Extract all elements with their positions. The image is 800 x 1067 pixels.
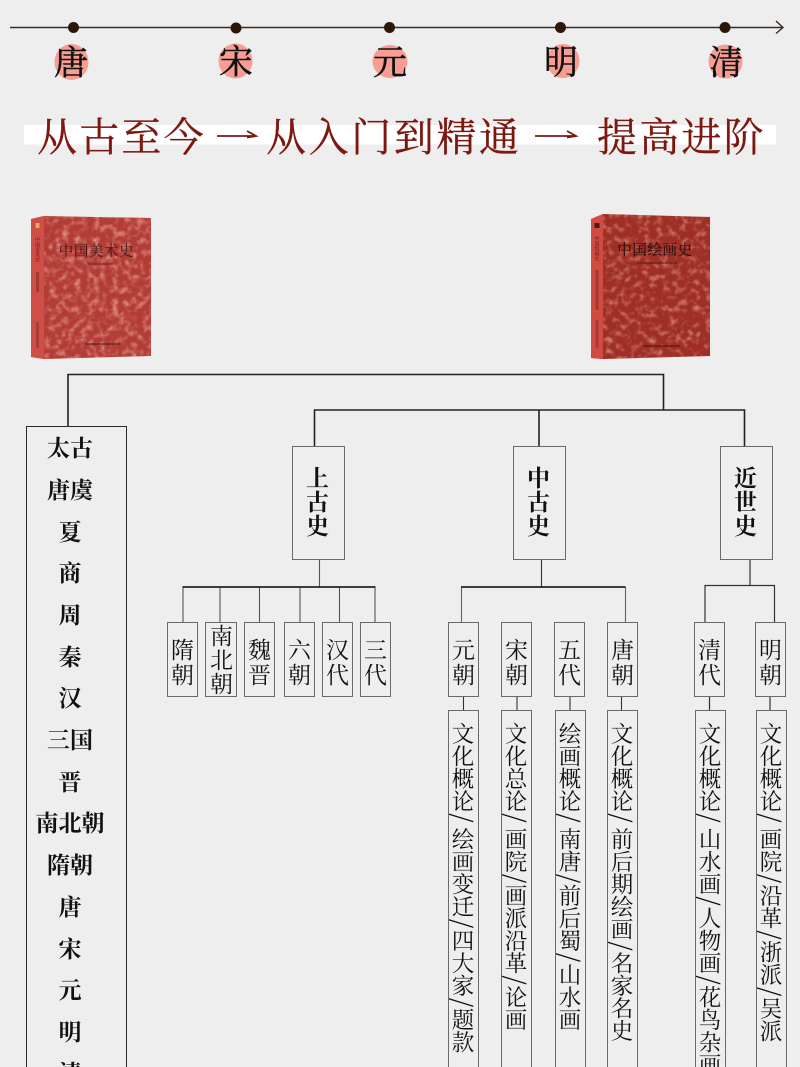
panel: left dynasty list: 秦 [58,639,82,672]
heading band: 提高进阶 [597,106,766,163]
box: 近世史 [720,446,773,560]
box: 中古史: 中古史 [522,466,555,538]
box: 元朝 [448,622,479,697]
panel: left dynasty list: 唐 [58,889,82,922]
box: 近世史: 近世史 [729,466,762,538]
timeline [10,21,783,34]
panel: left dynasty list: 夏 [58,514,82,547]
panel: left dynasty list: 隋朝 [47,847,93,880]
book: 中国美术史: 中国美术史 [34,236,41,263]
book: 中国美术史 [31,216,151,359]
connector: 近世史 branches [705,560,774,710]
connector: 中古史 branches [461,560,626,710]
book: 中国绘画史 [591,214,710,359]
box: 六朝 [284,622,315,697]
book: 中国绘画史: 中国绘画史 [594,235,600,262]
panel: left dynasty list: 晋 [58,764,82,797]
panel: left dynasty list: 唐虞 [47,472,93,505]
box: 宋朝 [501,622,532,697]
box: 三代 [360,622,391,697]
dynasty: 元: 元 [373,36,407,84]
heading band [24,106,776,163]
dynasty: 宋: 宋 [219,34,253,84]
panel: left dynasty list: 周 [58,597,82,630]
box: 隋朝 [167,622,198,697]
box: 上古史: 上古史 [301,466,334,538]
box: 汉代 [322,622,353,697]
box: 魏晋 [244,622,275,697]
heading band: 从古至今 [37,106,206,163]
panel: left dynasty list: 商 [58,555,82,588]
box: 五代 [554,622,585,697]
book: 中国美术史: 中国美术史 [59,240,134,261]
panel: left dynasty list: 汉 [58,680,82,713]
dynasty: 明: 明 [544,35,578,84]
connector: 上古史 branches [182,560,376,622]
panel: left dynasty list: 元 [58,972,82,1005]
box: 唐朝 [607,622,638,697]
box: 中古史 [513,446,566,560]
panel: left dynasty list: 宋 [58,931,82,964]
panel: left dynasty list: 太古 [47,430,93,463]
connector: top tree [68,374,744,446]
dynasty: 唐: 唐 [54,36,88,84]
dynasty: 清: 清 [709,36,743,84]
panel: left dynasty list: 三国 [47,722,93,755]
heading band: 从入门到精通 [266,106,522,163]
box: 清代 [694,622,725,697]
book: 中国绘画史: 中国绘画史 [617,239,693,260]
box: 明朝 [755,622,786,697]
panel: left dynasty list: 明 [58,1014,82,1047]
box: 上古史 [292,446,345,560]
panel: left dynasty list: 南北朝 [36,805,104,838]
panel: left dynasty list [26,426,127,1067]
